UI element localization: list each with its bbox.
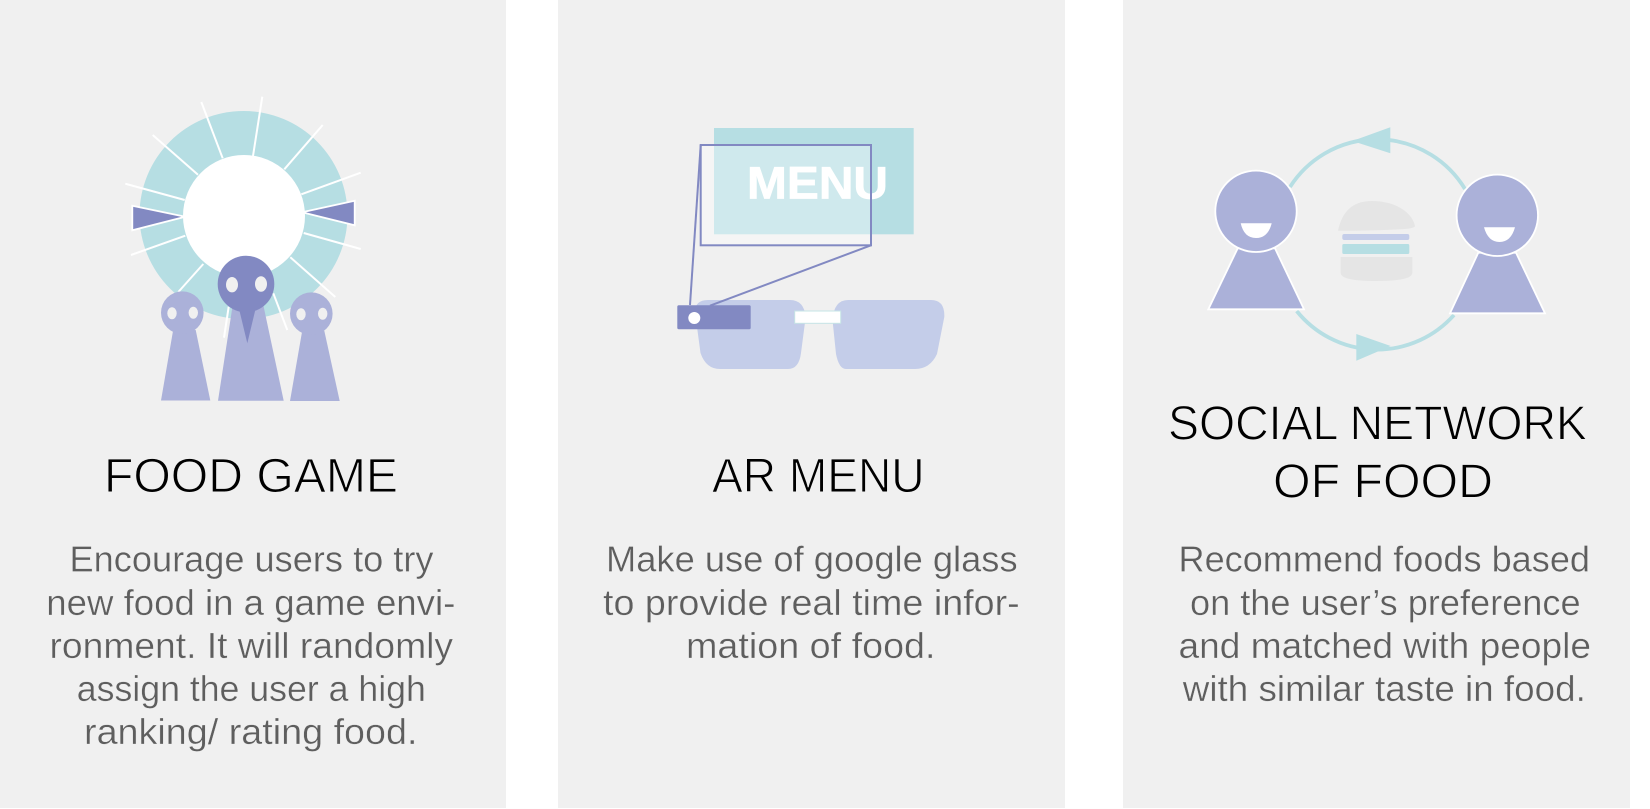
heading: food game: FOOD GAME: [104, 450, 398, 503]
text block: food game description: [46, 539, 455, 752]
heading: social network of food: [1168, 397, 1587, 508]
text block: ar menu description: [603, 539, 1020, 666]
heading: social network of food: SOCIAL NETWORK: [1168, 397, 1587, 450]
menu card: MENU: [747, 158, 888, 209]
left pawn: [161, 291, 210, 400]
wheel pointer left: [132, 206, 185, 230]
left person: [1208, 171, 1304, 309]
projection frame: [690, 145, 871, 306]
icon: prize wheel with pawns: [125, 97, 361, 401]
text block: social network description: on the user’s preference: [1190, 582, 1581, 623]
text block: social network description: Recommend foods based: [1178, 539, 1590, 580]
wheel pointer right: [302, 201, 355, 225]
text block: social network description: and matched with people: [1178, 625, 1591, 666]
text block: social network description: [1178, 539, 1591, 709]
right pawn: [290, 292, 340, 401]
right lens: [832, 300, 944, 369]
menu card: [714, 128, 914, 234]
text block: food game description: assign the user a high: [77, 668, 426, 709]
glass camera unit: [677, 305, 751, 329]
text block: ar menu description: to provide real time infor-: [603, 582, 1020, 623]
text block: food game description: ranking/ rating food.: [84, 711, 418, 752]
cycle arrows: [1290, 127, 1465, 361]
panel: social network of food: [1123, 0, 1630, 808]
heading: ar menu: AR MENU: [712, 450, 924, 503]
text block: food game description: new food in a game envi-: [46, 582, 455, 623]
right person: [1450, 175, 1545, 313]
left lens: [695, 300, 806, 369]
icon: smart glasses projecting a menu: [677, 128, 944, 369]
text block: food game description: Encourage users to try: [70, 539, 434, 580]
heading: social network of food: OF FOOD: [1273, 455, 1493, 508]
panel: food game: [0, 0, 506, 808]
panel: ar menu: [558, 0, 1065, 808]
text block: food game description: ronment. It will randomly: [50, 625, 453, 666]
wheel ring: [125, 97, 361, 338]
icon: two people sharing food: [1208, 127, 1545, 361]
text block: ar menu description: Make use of google glass: [606, 539, 1018, 580]
text block: social network description: with similar taste in food.: [1182, 668, 1586, 709]
burger: [1338, 201, 1415, 281]
glasses bridge: [795, 311, 841, 323]
centre pawn: [218, 256, 284, 401]
text block: ar menu description: mation of food.: [686, 625, 936, 666]
